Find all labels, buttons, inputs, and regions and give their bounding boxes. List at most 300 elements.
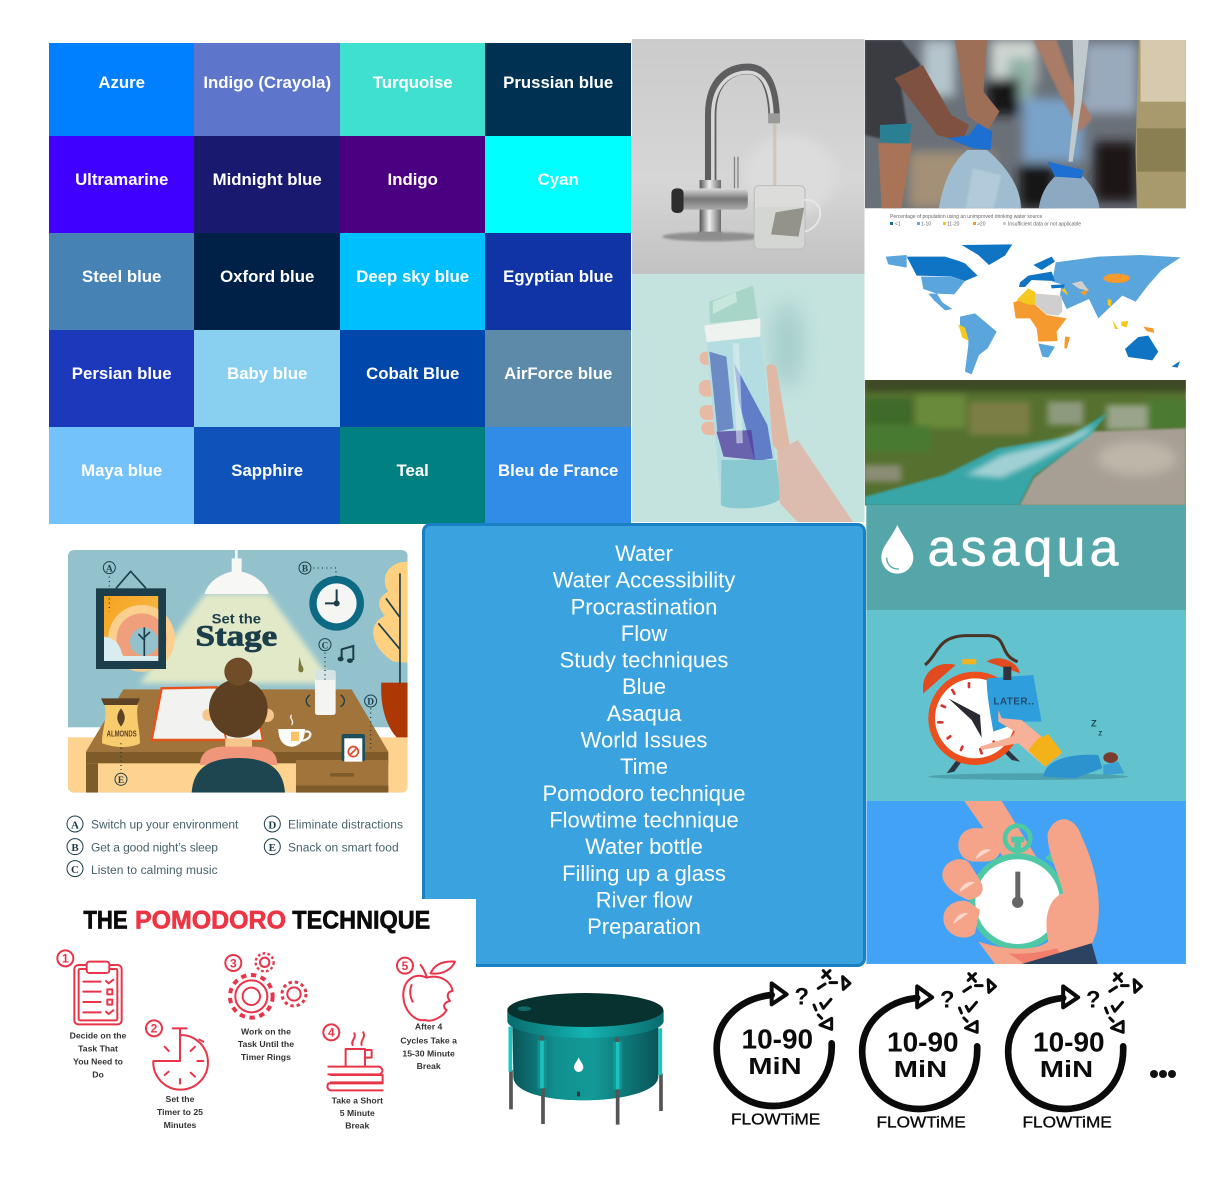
swatch: Bleu de France: Bleu de France <box>498 461 618 480</box>
keyword text lines: Flow <box>621 621 667 646</box>
flowtime label: FLOWTiME <box>876 1115 966 1132</box>
clock <box>309 576 364 631</box>
swatch: Teal <box>340 427 486 524</box>
yellow trousers <box>1028 734 1062 767</box>
legend item B: B <box>71 842 79 854</box>
painting rainbow <box>96 596 175 672</box>
wrist shade <box>1008 948 1062 964</box>
swatch: Sapphire: Sapphire <box>231 461 303 480</box>
ellipsis <box>1150 1070 1176 1078</box>
step 3: work on the task: Work on the <box>241 1027 291 1037</box>
keyword panel background <box>424 524 864 966</box>
clock pivot <box>334 600 340 606</box>
swatch: Egyptian blue <box>485 233 631 331</box>
water in bottle <box>721 460 781 508</box>
drop highlight <box>887 558 899 569</box>
skirting <box>68 727 408 738</box>
loop arrow <box>772 983 787 1004</box>
loop arrow <box>1063 986 1078 1007</box>
no sign <box>348 747 358 757</box>
stage legend <box>67 816 403 877</box>
swatch: Oxford blue <box>194 233 340 331</box>
clock hands <box>948 698 982 738</box>
light blue countries <box>886 255 1181 374</box>
marker letters: E <box>118 776 124 786</box>
step 1: decide on the task <box>57 950 127 1080</box>
purple reflection <box>716 430 755 460</box>
later sign <box>987 675 1042 732</box>
time label: 10-90 <box>887 1026 959 1057</box>
lighter gravel <box>1098 442 1176 475</box>
branch marks <box>959 974 995 1032</box>
jar leaf <box>117 708 125 727</box>
swatch: Prussian blue <box>485 43 631 137</box>
min label: MiN <box>748 1053 802 1079</box>
arm holding sign <box>980 710 1062 767</box>
pomodoro title: POMODORO <box>135 906 286 934</box>
jar label: ALMONDS <box>107 730 137 739</box>
legend item C: C <box>71 864 79 876</box>
sign clip <box>1003 667 1011 680</box>
faucet background <box>632 39 865 274</box>
faucet body <box>700 180 721 237</box>
blue blanket body <box>1043 755 1102 778</box>
step 5: long break: After 4 <box>415 1022 443 1032</box>
second z: Z <box>1098 731 1102 738</box>
crown stem <box>1011 837 1024 852</box>
swatch: Sapphire <box>194 427 340 524</box>
legend item C: Listen to calming music <box>91 863 218 877</box>
step 5: long break: 15-30 Minute <box>402 1048 455 1058</box>
grey countries <box>1036 281 1089 316</box>
legend item A: A <box>71 819 79 831</box>
book right page <box>220 717 263 741</box>
bottle cap <box>709 286 758 323</box>
drawer handle <box>330 773 354 777</box>
forearm 2 <box>955 40 999 132</box>
plant leaf <box>373 562 408 663</box>
river water foam <box>966 425 1094 478</box>
flowtime label: FLOWTiME <box>731 1112 820 1129</box>
river background <box>865 380 1186 506</box>
keyword text lines: Water Accessibility <box>553 568 735 593</box>
faucet lever <box>734 157 739 190</box>
swatch: Baby blue: Baby blue <box>227 364 307 383</box>
step 1: decide on the task: Do <box>92 1070 104 1080</box>
clock feet <box>947 750 1020 773</box>
step 3: work on the task: Task Until the <box>238 1039 294 1049</box>
foliage and river blobs <box>862 377 1193 482</box>
tank rim <box>507 1010 664 1038</box>
bells <box>923 658 1020 693</box>
map legend: Percentage of population using an unimproved drinking water source <box>890 214 1043 220</box>
faucet spout highlight <box>713 72 772 183</box>
chair <box>192 758 285 793</box>
step 3: work on the task: Timer Rings <box>241 1052 291 1062</box>
lamp <box>205 550 269 594</box>
speaker <box>315 670 336 715</box>
panel: the Pomodoro technique <box>40 899 476 1145</box>
swatch: Cobalt Blue: Cobalt Blue <box>366 364 459 383</box>
swatch: Egyptian blue: Egyptian blue <box>503 267 613 286</box>
dark blue countries <box>907 244 1180 368</box>
flow loop <box>717 995 832 1106</box>
sound waves <box>306 695 344 707</box>
keyword text lines: Study techniques <box>560 648 728 673</box>
ear left <box>202 709 214 721</box>
logo wordmark: asaqua <box>928 519 1119 577</box>
question mark: ? <box>794 983 809 1010</box>
water stream <box>773 123 776 187</box>
tank body <box>512 1023 658 1100</box>
step 4: take a short break: Break <box>345 1120 370 1130</box>
yellow countries <box>958 288 1128 341</box>
question mark: ? <box>940 986 954 1013</box>
bottle photo background <box>632 274 865 522</box>
thumb <box>766 364 790 453</box>
flow loop <box>1008 998 1123 1109</box>
bottle shadow <box>771 302 803 388</box>
speaker top shade <box>315 670 336 680</box>
swatch: Persian blue: Persian blue <box>72 364 172 383</box>
floor <box>68 737 408 793</box>
world map: unimproved drinking water source <box>865 209 1186 380</box>
step 2: set the timer: Timer to 25 <box>157 1107 203 1117</box>
desk leg <box>86 763 98 793</box>
ground shadow <box>928 773 1128 780</box>
swatch: Deep sky blue: Deep sky blue <box>356 267 469 286</box>
keyword text lines <box>542 541 746 939</box>
step 4: take a short break: 4 <box>328 1026 335 1040</box>
tank logo drop <box>574 1057 583 1072</box>
pomodoro title: THE <box>83 906 128 934</box>
photo: mountain river <box>862 377 1193 506</box>
drawer divider <box>296 786 388 793</box>
swatch: Azure <box>49 43 195 137</box>
faucet handle end <box>671 188 684 213</box>
tank lid <box>507 993 663 1027</box>
swatch: Oxford blue: Oxford blue <box>220 267 314 286</box>
desk front <box>86 752 388 763</box>
painting tree <box>138 627 150 656</box>
wall <box>68 550 408 793</box>
water jet <box>1068 40 1089 162</box>
swatch: Indigo (Crayola) <box>194 43 340 137</box>
step 5: long break: 5 <box>402 959 409 973</box>
step 2: set the timer: 2 <box>151 1022 158 1036</box>
shorts <box>880 123 912 145</box>
picture frame <box>96 588 166 669</box>
clock face <box>317 583 357 623</box>
soft backdrop glow <box>765 144 822 210</box>
marker letters: A <box>106 564 113 574</box>
step 4: take a short break: 5 Minute <box>340 1108 375 1118</box>
swatch: Bleu de France <box>485 427 631 524</box>
fingers <box>942 828 1002 938</box>
step 1: decide on the task: 1 <box>62 952 69 966</box>
heading: set the stage: Set the <box>212 610 261 626</box>
dotted leaders <box>109 568 371 770</box>
ear <box>261 709 274 722</box>
stopwatch pivot <box>1012 897 1023 908</box>
wall upper <box>1141 40 1186 102</box>
bottle body <box>707 336 776 502</box>
question mark: ? <box>1086 986 1100 1013</box>
side button <box>1045 850 1060 863</box>
keyword text lines: Water <box>615 541 673 566</box>
alarm background <box>866 610 1186 801</box>
background colour blobs <box>908 40 1137 208</box>
step 1: decide on the task: Task That <box>78 1044 118 1054</box>
keyword text lines: Pomodoro technique <box>542 781 746 806</box>
step 5: long break: Break <box>417 1061 441 1071</box>
heading: set the stage: Stage <box>195 620 277 653</box>
swatch: Deep sky blue <box>340 233 486 331</box>
stopwatch background <box>866 801 1186 964</box>
stone wall <box>1136 40 1186 208</box>
map continents <box>886 244 1181 374</box>
note heads <box>338 657 353 663</box>
drawer unit <box>296 760 388 793</box>
keyword text lines: Asaqua <box>607 701 682 726</box>
legend item A: Switch up your environment <box>91 818 239 832</box>
step 3: work on the task <box>225 953 306 1062</box>
flowtime diagram 1 <box>717 971 850 1129</box>
time label: 10-90 <box>742 1023 813 1054</box>
min label: MiN <box>1040 1056 1093 1082</box>
keyword text lines: Water bottle <box>585 834 703 859</box>
illustration: Set the Stage <box>67 550 408 877</box>
lid hatch <box>518 1006 531 1011</box>
map legend: Insufficient data or not applicable <box>1008 222 1081 228</box>
stopwatch crown <box>1005 826 1030 851</box>
plant pot <box>381 683 408 737</box>
step 2: set the timer <box>146 1020 208 1130</box>
plant stem <box>378 573 400 683</box>
bottles photo background <box>865 40 1186 208</box>
arm <box>894 65 969 142</box>
swatch: Cyan: Cyan <box>538 170 579 189</box>
step 1: decide on the task: You Need to <box>73 1057 123 1067</box>
swatch: Ultramarine <box>49 136 195 234</box>
map legend: 11-20 <box>947 222 960 228</box>
swatch: Steel blue: Steel blue <box>82 267 161 286</box>
clock ticks <box>938 683 996 753</box>
faucet shadow <box>662 232 762 241</box>
jar lid <box>101 698 140 705</box>
flowtime diagram 3 <box>1008 974 1141 1132</box>
keyword text lines: River flow <box>596 887 692 912</box>
map legend: <1 <box>895 222 901 228</box>
marker letters: C <box>322 641 329 651</box>
sleeve <box>1022 943 1098 964</box>
icon: water drop <box>881 525 913 574</box>
swatch: AirForce blue <box>485 330 631 428</box>
swatch: Indigo: Indigo <box>388 170 438 189</box>
map legend: 1-10 <box>921 222 931 228</box>
swatch: Indigo (Crayola): Indigo (Crayola) <box>203 73 331 92</box>
tank front legs <box>542 1036 618 1125</box>
left blue streak <box>709 352 734 432</box>
pillow <box>1103 762 1124 775</box>
map legend <box>890 214 1081 228</box>
jug shading <box>966 168 1001 208</box>
illustration: teal water tank <box>507 993 664 1125</box>
flow loop <box>862 998 977 1109</box>
marker letters: D <box>367 698 374 708</box>
cup handle <box>302 731 310 741</box>
swatch: Prussian blue: Prussian blue <box>503 73 613 92</box>
open book <box>152 687 227 740</box>
legend item B: Get a good night’s sleep <box>91 840 218 854</box>
keyword text lines: Preparation <box>587 914 701 939</box>
loop arrow <box>917 986 932 1007</box>
step 3: work on the task: 3 <box>230 956 237 970</box>
clock face <box>932 675 1018 762</box>
strap panels <box>542 1040 618 1089</box>
glass mug <box>754 186 820 249</box>
skin arm right <box>1033 40 1092 132</box>
clock hands <box>325 589 337 603</box>
index finger <box>964 801 1052 888</box>
marker letters <box>103 562 377 786</box>
legend item D: D <box>268 819 276 831</box>
swatch: Midnight blue <box>194 136 340 234</box>
hair bun <box>224 658 252 686</box>
swatch: Turquoise <box>340 43 486 137</box>
tank valve <box>577 1092 580 1096</box>
step 2: set the timer: Minutes <box>164 1120 197 1130</box>
big water jug <box>939 150 1021 208</box>
swatch: Indigo <box>340 136 486 234</box>
step 1: decide on the task: Decide on the <box>70 1031 127 1041</box>
flowtime label: FLOWTiME <box>1022 1115 1112 1132</box>
step 5: long break <box>397 958 457 1071</box>
head <box>1103 752 1118 763</box>
forearm <box>777 440 853 522</box>
sign text: LATER.. <box>993 696 1034 707</box>
step 4: take a short break <box>323 1024 383 1130</box>
tank back legs <box>511 1070 661 1111</box>
pomodoro title <box>83 906 430 934</box>
logo background <box>866 505 1186 610</box>
teabag <box>291 732 299 741</box>
spout tip <box>768 113 780 123</box>
small jug <box>1039 177 1099 208</box>
keyword text lines: Flowtime technique <box>549 808 739 832</box>
highlight <box>733 343 743 443</box>
orange countries <box>1013 274 1154 348</box>
keyword text lines: Blue <box>622 674 666 699</box>
branch marks <box>1105 974 1141 1032</box>
keyword text lines: World Issues <box>581 728 707 752</box>
cap loop <box>713 292 737 314</box>
branch marks <box>814 971 850 1029</box>
stage scene <box>68 550 408 793</box>
swatch: Persian blue <box>49 330 195 428</box>
legend item E: Snack on smart food <box>288 840 399 854</box>
river water <box>865 412 1108 506</box>
legend item E: E <box>269 842 276 854</box>
panel: Asaqua logo <box>866 505 1186 610</box>
map background <box>865 209 1186 380</box>
swatch: Maya blue <box>49 427 195 524</box>
swatch: Cyan <box>485 136 631 234</box>
top <box>200 747 277 765</box>
sleep z letters: Z <box>1091 719 1097 729</box>
panel: keyword list <box>424 524 864 966</box>
swatch: Teal: Teal <box>397 461 429 480</box>
pomodoro title: TECHNIQUE <box>292 906 430 934</box>
keyword text lines: Filling up a glass <box>562 861 726 886</box>
colour swatch grid <box>49 43 631 524</box>
thumb and palm <box>978 819 1099 964</box>
swatch: Azure: Azure <box>98 73 145 92</box>
keyword text lines: Procrastination <box>571 594 717 619</box>
music notes <box>342 646 353 660</box>
keyword text lines: Time <box>620 754 668 779</box>
step 4: take a short break: Take a Short <box>332 1095 383 1105</box>
faucet horizontal cylinder <box>683 188 748 210</box>
small cap <box>1048 162 1083 178</box>
tank side straps <box>510 1027 660 1089</box>
blue cap big jug <box>948 123 992 150</box>
swatch: Turquoise: Turquoise <box>373 73 453 92</box>
stopwatch body <box>972 856 1063 947</box>
photo: kitchen faucet and glass mug <box>632 39 865 274</box>
swatch: Cobalt Blue <box>340 330 486 428</box>
right blue streak <box>734 363 773 462</box>
phone <box>342 734 365 761</box>
legend item D: Eliminate distractions <box>288 818 403 832</box>
swatch: AirForce blue: AirForce blue <box>504 364 612 383</box>
heading: set the stage <box>195 610 277 653</box>
wall shadow band <box>1137 128 1186 172</box>
step 5: long break: Cycles Take a <box>400 1035 457 1045</box>
steam <box>291 715 293 725</box>
teacup <box>278 729 305 747</box>
painting <box>104 596 158 661</box>
flowtime diagram 2 <box>862 974 995 1132</box>
dark shirt <box>865 40 921 138</box>
min label: MiN <box>894 1056 947 1082</box>
almonds jar <box>102 703 140 747</box>
step 2: set the timer: Set the <box>166 1094 195 1104</box>
phone screen <box>344 738 362 762</box>
faucet base ring <box>698 232 722 237</box>
swatch: Baby blue <box>194 330 340 428</box>
picture hanger <box>116 571 146 588</box>
hair <box>209 679 268 738</box>
marker letters: B <box>302 565 308 575</box>
faucet spout outer <box>711 69 774 183</box>
photo: people filling water bottles <box>865 40 1186 208</box>
white band <box>704 318 760 342</box>
neck <box>225 738 252 752</box>
pomodoro background <box>40 899 476 1145</box>
knuckle highlights <box>953 849 991 924</box>
stopwatch hand <box>1015 872 1020 902</box>
fingers <box>698 352 715 435</box>
panel: procrastination alarm clock <box>866 610 1186 801</box>
light cone <box>140 594 333 683</box>
swatch: Steel blue <box>49 233 195 331</box>
clock top button <box>962 659 976 664</box>
desk top <box>86 689 388 752</box>
swatch: Maya blue: Maya blue <box>81 461 162 480</box>
time label: 10-90 <box>1033 1026 1105 1057</box>
photo: hand holding water bottle <box>632 274 865 522</box>
